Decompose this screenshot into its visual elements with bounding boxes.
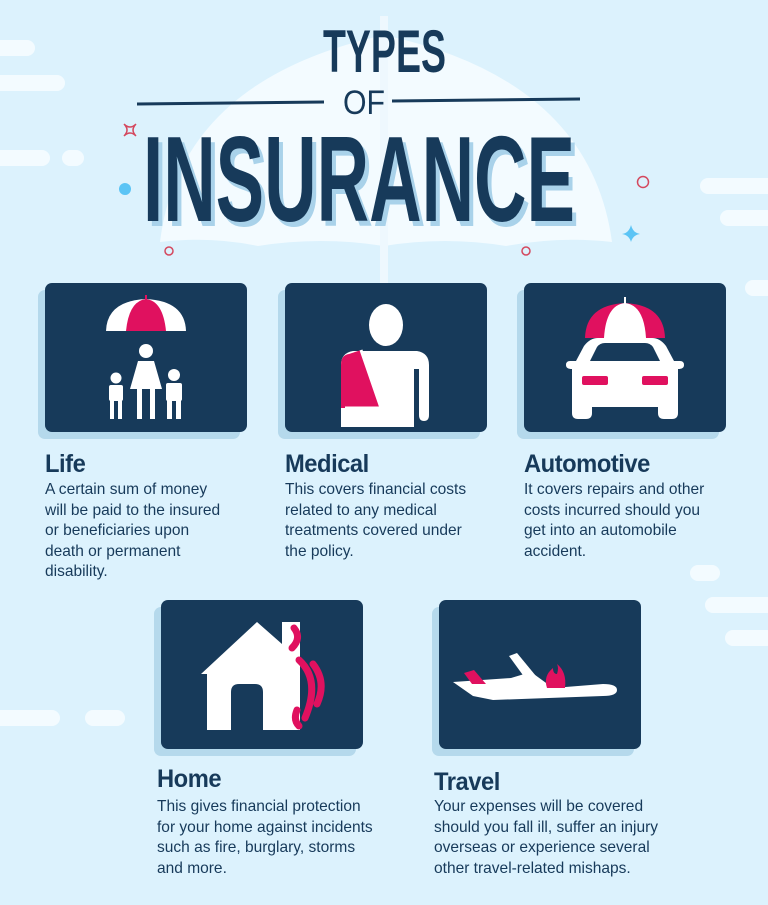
text: life: death or permanent <box>45 543 180 560</box>
text: home: for your home against incidents <box>157 819 373 836</box>
text: automotive <box>524 481 704 560</box>
text: life: or beneficiaries upon <box>45 522 189 539</box>
text: home: and more. <box>157 860 227 877</box>
heading: travel: Travel <box>434 768 500 796</box>
panel: travel <box>439 600 641 749</box>
text: life <box>45 481 220 580</box>
heading: medical: Medical <box>285 450 369 478</box>
text: life: will be paid to the insured <box>45 502 220 519</box>
text: medical <box>285 481 466 560</box>
text: home: such as fire, burglary, storms <box>157 839 355 856</box>
text: automotive: It covers repairs and other <box>524 481 704 498</box>
text: life: disability. <box>45 563 108 580</box>
panel: home <box>161 600 363 749</box>
text: home: This gives financial protection <box>157 798 361 815</box>
text: travel: overseas or experience several <box>434 839 650 856</box>
title <box>137 18 580 240</box>
text: travel: Your expenses will be covered <box>434 798 643 815</box>
text: automotive: accident. <box>524 543 586 560</box>
text: medical: treatments covered under <box>285 522 462 539</box>
text: medical: related to any medical <box>285 502 437 519</box>
panel: medical <box>285 283 487 432</box>
text: travel: should you fall ill, suffer an injury <box>434 819 658 836</box>
text: medical: the policy. <box>285 543 354 560</box>
heading: home: Home <box>157 765 221 793</box>
background umbrella <box>119 16 650 283</box>
text: life: A certain sum of money <box>45 481 207 498</box>
text: medical: This covers financial costs <box>285 481 466 498</box>
panel: life <box>45 283 247 432</box>
panel: automotive <box>524 283 726 432</box>
heading: automotive: Automotive <box>524 450 650 478</box>
text: automotive: get into an automobile <box>524 522 677 539</box>
text: automotive: costs incurred should you <box>524 502 700 519</box>
text: travel: other travel-related mishaps. <box>434 860 631 877</box>
text: home <box>157 798 373 877</box>
title: OF <box>343 84 385 122</box>
heading: life: Life <box>45 450 85 478</box>
text: travel <box>434 798 658 877</box>
background clouds <box>0 40 768 726</box>
title: TYPES <box>323 18 446 85</box>
